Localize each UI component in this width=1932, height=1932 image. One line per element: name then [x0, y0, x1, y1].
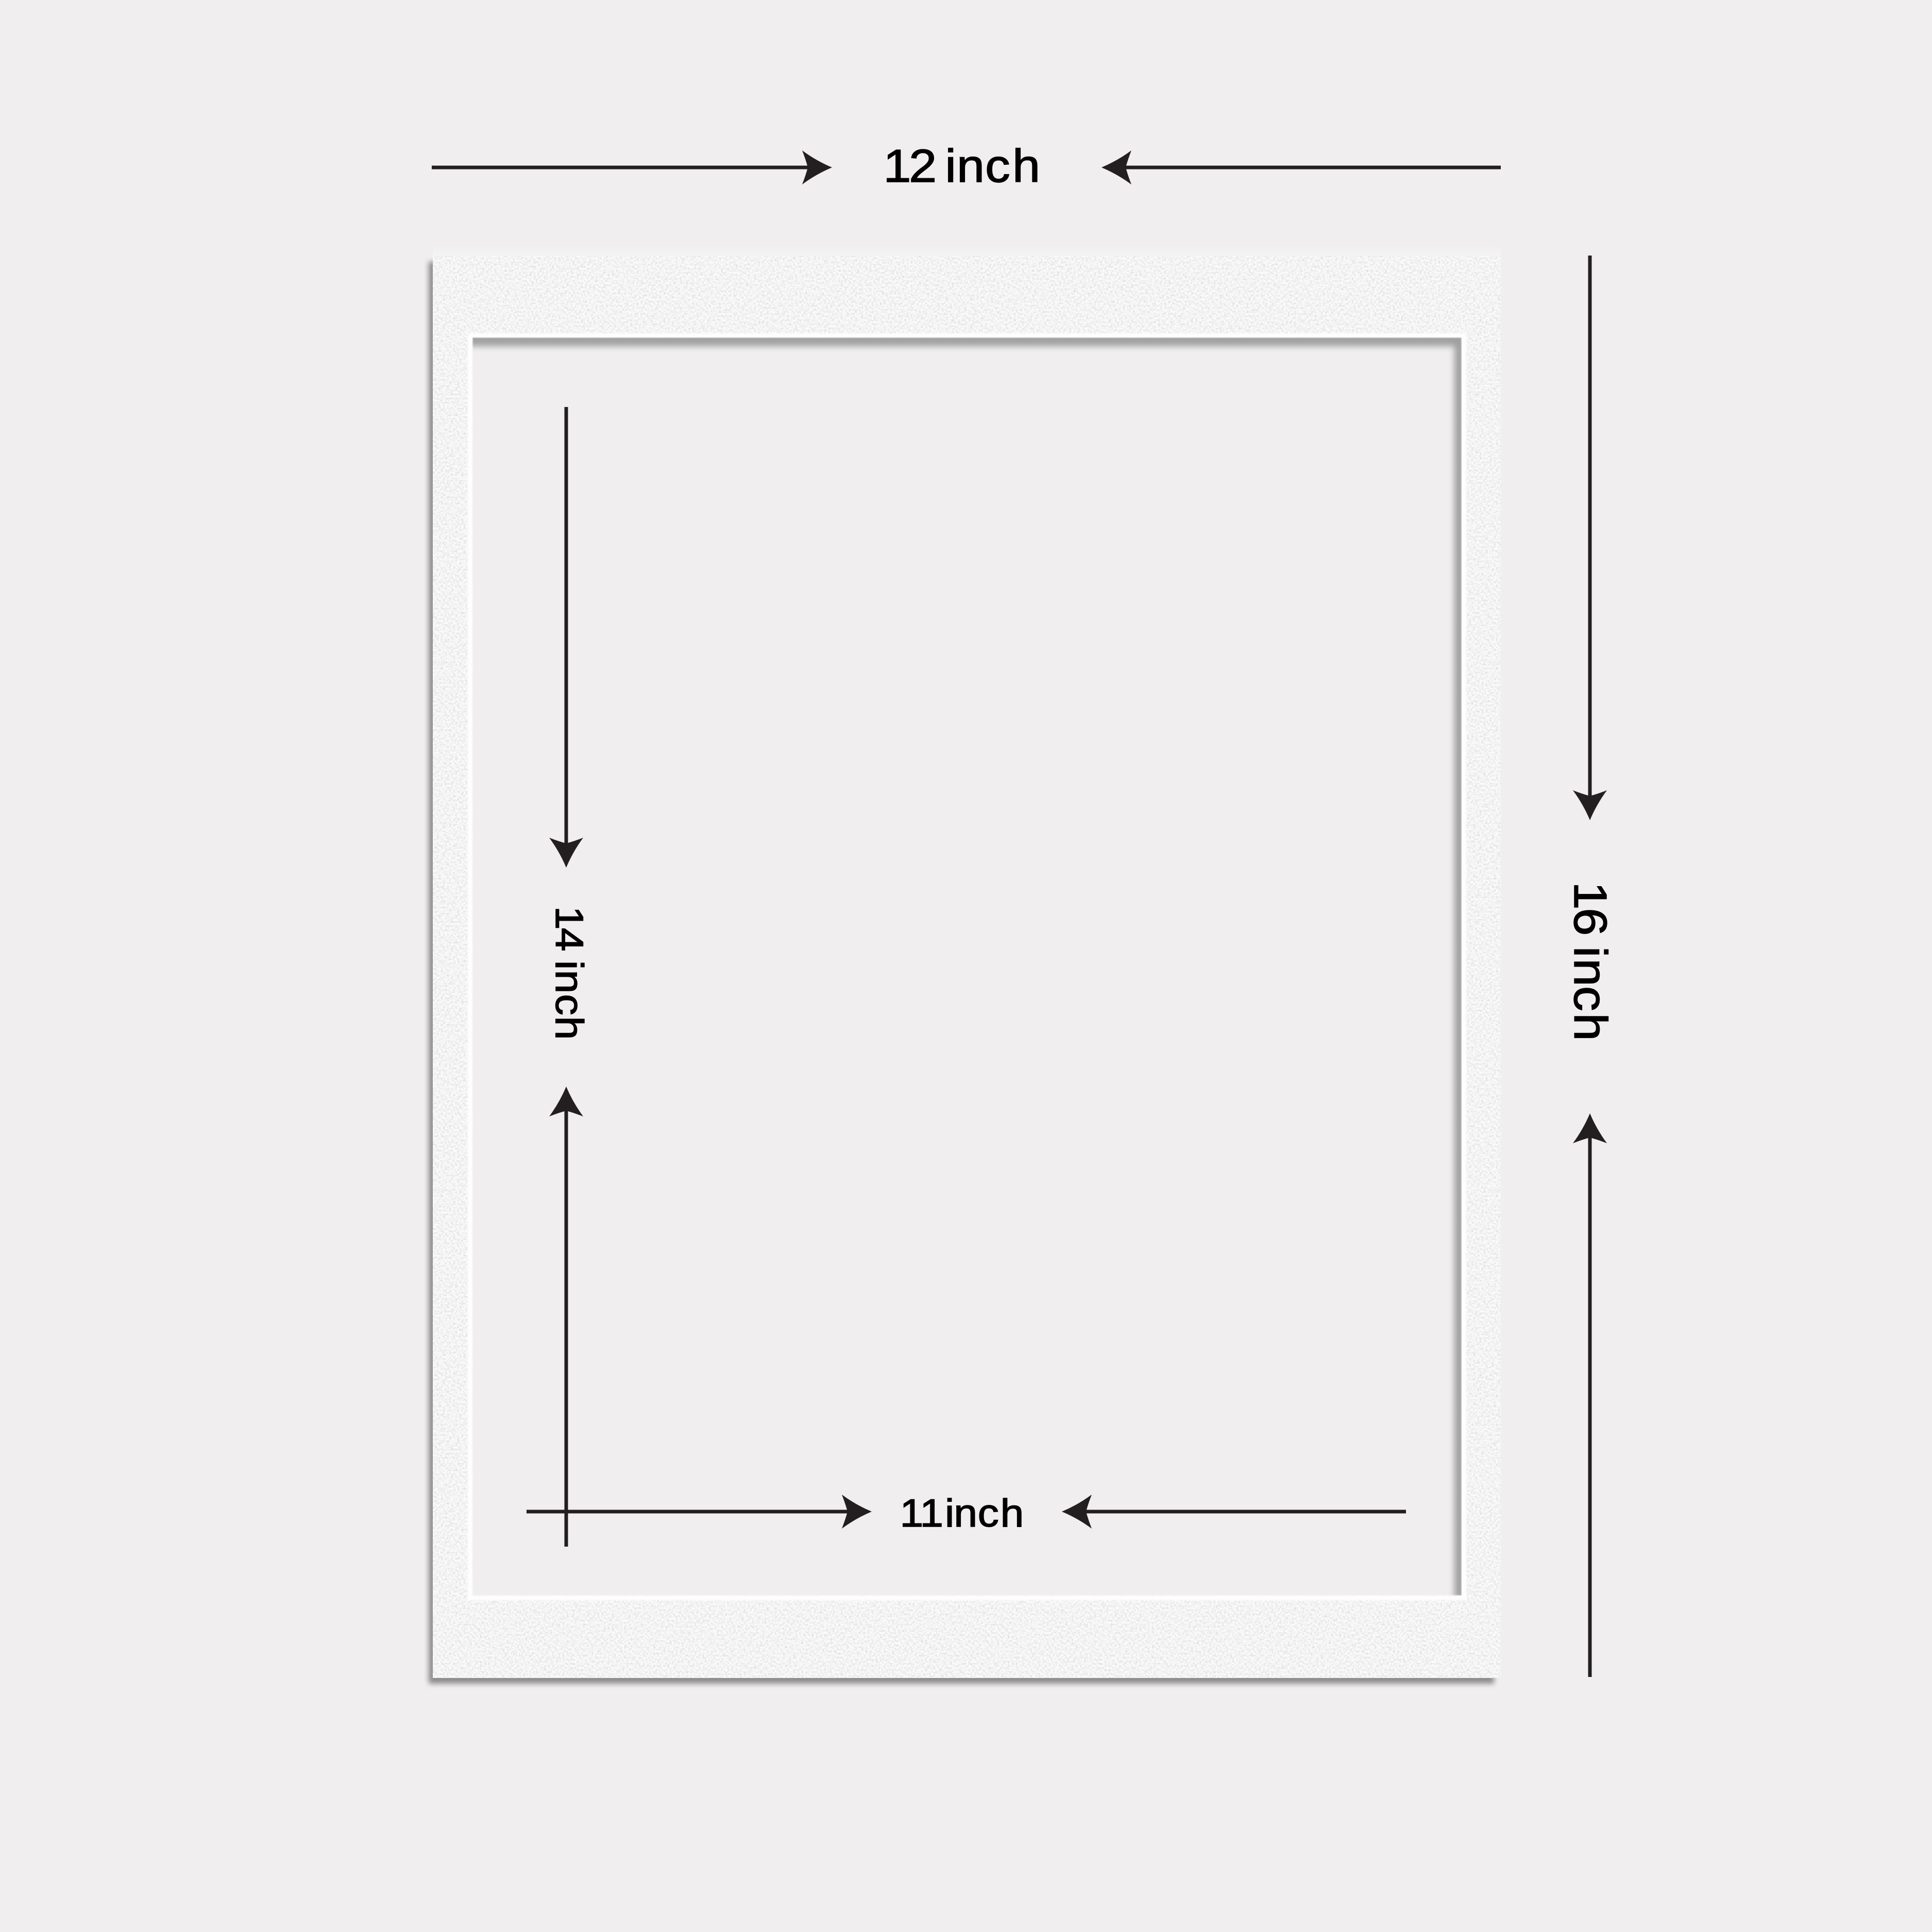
diagram: mat board dimensions	[425, 147, 1608, 1687]
label: 11 inch: 11 inch	[900, 1491, 1024, 1535]
window bevel highlight	[468, 333, 1466, 1600]
dimension: 16 inch outer height	[1565, 256, 1617, 1677]
window opening	[472, 337, 1462, 1596]
label: 12 inch: 12 inch	[883, 140, 1040, 192]
inner window shadow	[472, 337, 1462, 1596]
paper grain texture	[433, 256, 1501, 1678]
arrow: pointing right	[527, 1495, 872, 1529]
arrow: pointing up	[549, 1087, 583, 1547]
dimension: 12 inch outer width	[432, 140, 1501, 192]
outer drop shadow	[429, 244, 1501, 1684]
dimension: 11 inch window width	[527, 1491, 1406, 1535]
label: 16 inch: 16 inch	[1565, 882, 1617, 1041]
label: 14 inch: 14 inch	[548, 906, 591, 1040]
mat board surface	[433, 256, 1501, 1678]
arrow: pointing down	[549, 407, 583, 868]
dimension: 14 inch window height	[548, 407, 591, 1547]
arrow: pointing right	[432, 150, 832, 184]
arrow: pointing up	[1573, 1113, 1607, 1677]
arrow: pointing left	[1101, 150, 1501, 184]
arrow: pointing left	[1062, 1495, 1406, 1529]
panel: mat board frame	[412, 244, 1501, 1684]
arrow: pointing down	[1573, 256, 1607, 820]
